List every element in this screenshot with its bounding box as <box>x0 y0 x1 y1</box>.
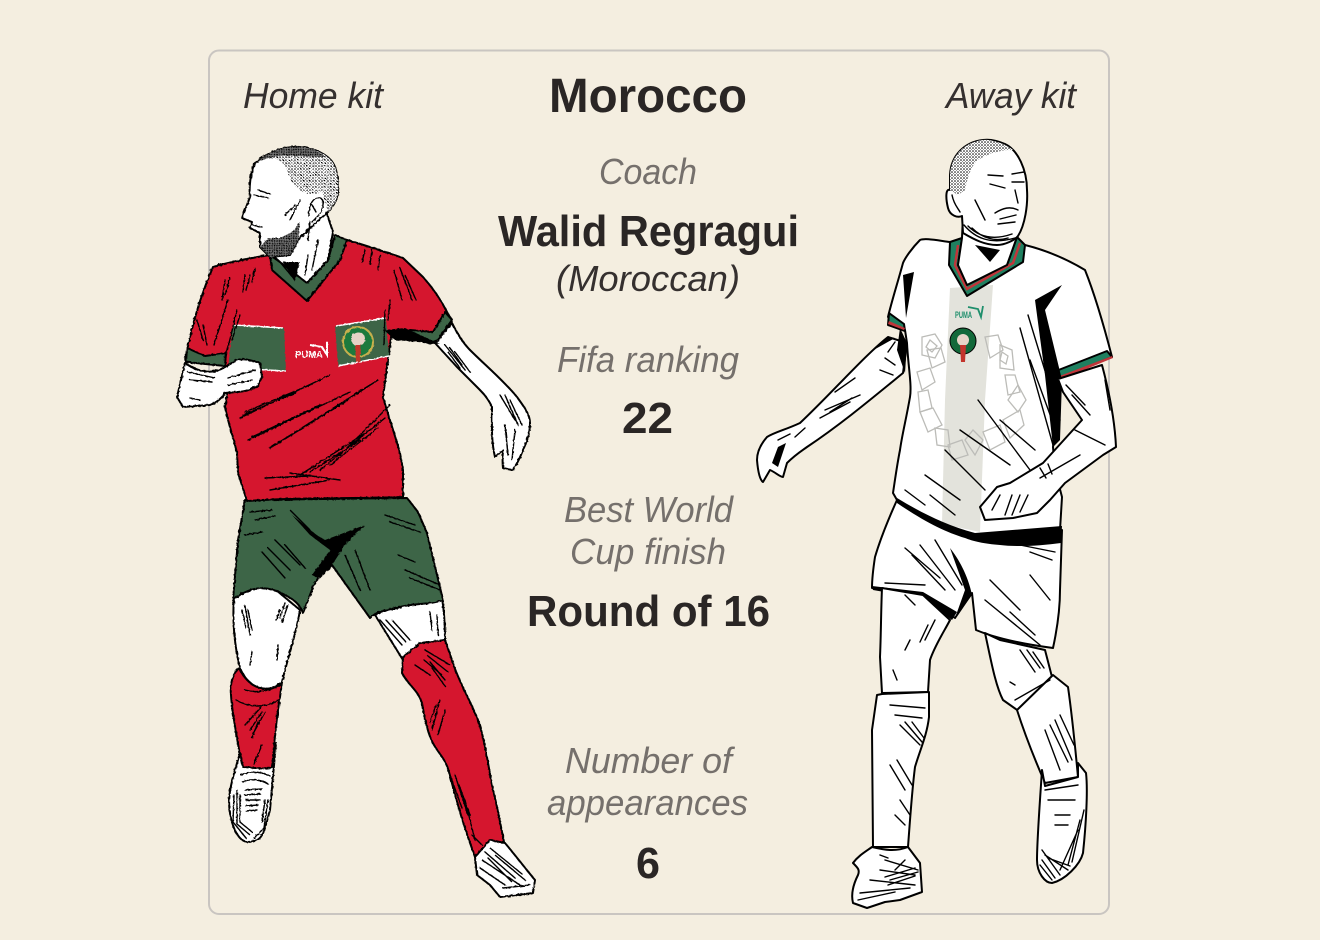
cuffs <box>186 312 452 366</box>
jersey chest bands <box>228 318 389 371</box>
left leg <box>229 585 300 842</box>
left arm and hand <box>177 359 262 407</box>
ear and face marks <box>252 190 323 280</box>
text block: coach: Coach <box>599 151 697 192</box>
geometric pattern <box>917 334 1026 460</box>
panel: card frame <box>209 50 1109 914</box>
away legs <box>872 588 1078 847</box>
text block: best world cup finish <box>527 489 770 636</box>
text block: coach: Walid Regragui <box>498 207 799 256</box>
right arm <box>435 323 530 470</box>
right leg <box>375 598 535 897</box>
far arm <box>757 337 907 482</box>
away puma logo: PUMA <box>955 310 972 321</box>
beard <box>260 222 300 257</box>
away hem band <box>897 498 1062 546</box>
text block: fifa ranking: Fifa ranking <box>557 339 739 380</box>
text block: number of appearances <box>547 740 748 888</box>
away right arm <box>980 365 1116 520</box>
text block: fifa ranking <box>557 339 739 443</box>
away cuffs <box>888 313 905 331</box>
heading: home kit: Home kit <box>243 75 385 116</box>
crest <box>342 326 374 362</box>
text block: fifa ranking: 22 <box>622 394 673 443</box>
shorts <box>233 498 443 618</box>
text block: best world cup finish: Best World <box>564 489 734 530</box>
jersey <box>185 235 452 501</box>
illustration: player in home kit <box>177 147 535 897</box>
collar <box>270 235 347 301</box>
text block: number of appearances: Number of <box>565 740 736 781</box>
away neck and head <box>946 140 1027 285</box>
hair <box>256 147 338 212</box>
illustration: player in away kit <box>757 140 1116 908</box>
away beard and face <box>952 172 1024 241</box>
heading: away kit: Away kit <box>944 75 1078 116</box>
text block: best world cup finish: Cup finish <box>570 531 726 572</box>
text block: number of appearances: appearances <box>547 782 748 823</box>
shirt folds <box>197 250 416 490</box>
text block: number of appearances: 6 <box>636 839 660 888</box>
away collar <box>949 237 1025 296</box>
away shirt <box>888 237 1113 546</box>
away shirt folds and shadows <box>903 272 1062 447</box>
away shorts <box>872 500 1062 648</box>
shirt stripe <box>942 285 993 532</box>
title: Morocco <box>549 70 747 123</box>
away crest <box>950 328 976 362</box>
text block: best world cup finish: Round of 16 <box>527 587 770 636</box>
text block: coach: (Moroccan) <box>556 258 740 299</box>
away hair <box>950 140 1013 195</box>
neck and head <box>242 147 338 283</box>
puma logo: PUMA <box>295 350 323 361</box>
text block: coach <box>498 151 799 299</box>
away boots <box>852 763 1087 908</box>
